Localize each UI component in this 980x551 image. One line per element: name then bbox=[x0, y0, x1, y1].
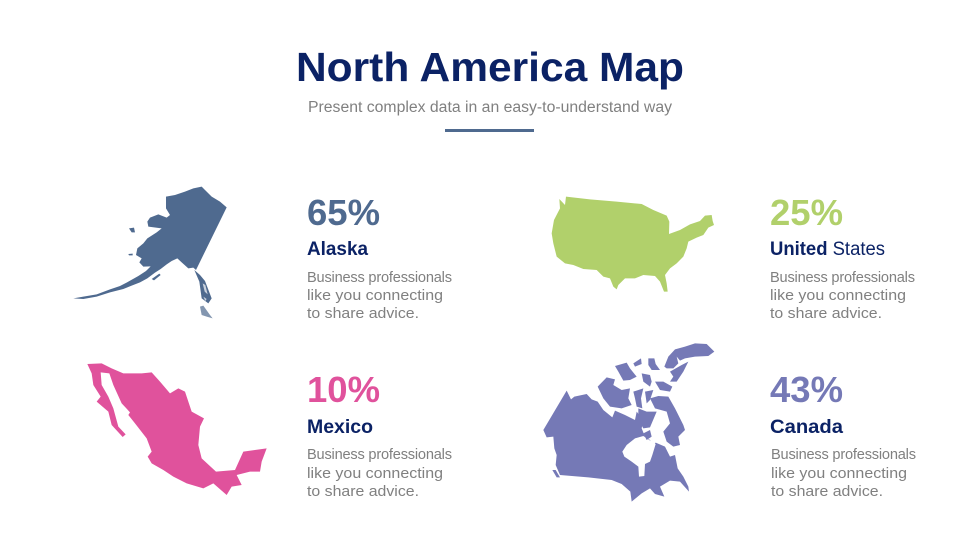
stat: Canada: like you connecting bbox=[771, 465, 907, 482]
stat: United States: like you connecting bbox=[770, 287, 906, 304]
stat: Canada bbox=[770, 369, 916, 500]
stat: Canada: 43% bbox=[770, 369, 843, 410]
stat: Mexico: like you connecting bbox=[307, 465, 443, 482]
stat: Alaska: 65% bbox=[307, 192, 380, 233]
stat: United States: to share advice. bbox=[770, 305, 882, 322]
stat: United States: United States bbox=[770, 239, 885, 260]
stat: Alaska: to share advice. bbox=[307, 305, 419, 322]
subtitle: Present complex data in an easy-to-understand way bbox=[308, 99, 672, 116]
stat: Alaska: Alaska bbox=[307, 239, 368, 260]
title: North America Map bbox=[296, 44, 684, 90]
stat: Canada: Canada bbox=[770, 417, 843, 438]
stat: Alaska: like you connecting bbox=[307, 287, 443, 304]
title underline bbox=[445, 129, 534, 132]
stat: Mexico: 10% bbox=[307, 369, 380, 410]
stat: United States: Business professionals bbox=[770, 270, 915, 286]
stat: Mexico bbox=[307, 369, 452, 500]
stat: United States bbox=[770, 192, 915, 322]
stat: Mexico: Mexico bbox=[307, 417, 373, 438]
stat: Canada: Business professionals bbox=[771, 447, 916, 463]
stat: Canada: to share advice. bbox=[771, 483, 883, 500]
map: United States bbox=[552, 197, 714, 292]
map: Canada bbox=[543, 343, 714, 502]
stat: United States: 25% bbox=[770, 192, 843, 233]
stat: Alaska: Business professionals bbox=[307, 270, 452, 286]
stat: Mexico: to share advice. bbox=[307, 483, 419, 500]
map: Mexico bbox=[87, 363, 267, 495]
stat: Mexico: Business professionals bbox=[307, 447, 452, 463]
map: Alaska bbox=[73, 187, 227, 318]
stat: Alaska bbox=[307, 192, 452, 322]
